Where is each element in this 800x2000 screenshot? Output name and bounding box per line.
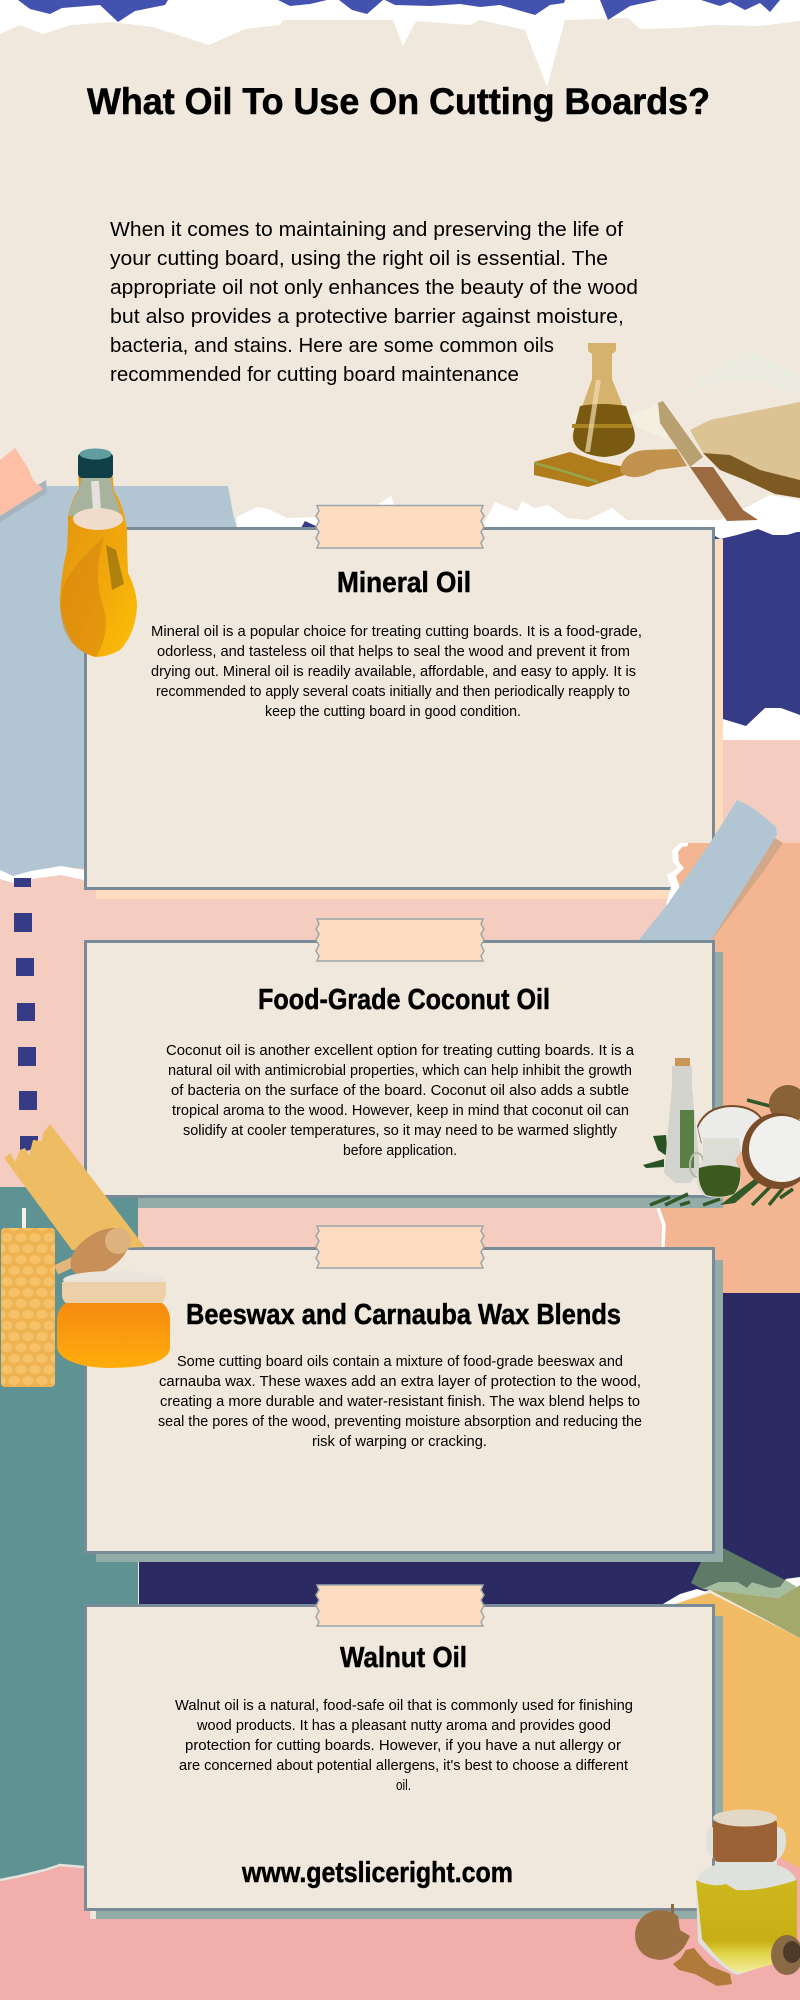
tape label [316, 1585, 484, 1626]
text block: introduction [110, 218, 638, 386]
icon: torn peach paper corner [0, 448, 47, 522]
text: walnut oil description: are concerned about potential allergens, it's best to choose a different [179, 1758, 628, 1774]
icon: navy dashed squares [14, 878, 38, 1152]
heading: mineral oil: Mineral Oil [337, 567, 471, 599]
text: mineral oil description: Mineral oil is a popular choice for treating cutting boards. It is a food-grade, [151, 624, 642, 640]
text: coconut oil description: Coconut oil is another excellent option for treating cutting boards. It is a [166, 1043, 635, 1059]
background: torn pale edge on pink paper [0, 1865, 84, 1880]
panel: walnut oil card [86, 1585, 723, 1919]
text: wax blends description: risk of warping or cracking. [312, 1434, 487, 1450]
text: wax blends description: creating a more durable and water-resistant finish. The wax blend helps to [160, 1394, 640, 1410]
text: wax blends description: seal the pores of the wood, preventing moisture absorption and reducing the [158, 1414, 642, 1430]
text: coconut oil description [166, 1043, 635, 1159]
text: wax blends description [158, 1354, 642, 1450]
background: pink bottom paper [0, 1855, 800, 2000]
heading: walnut oil: Walnut Oil [340, 1642, 467, 1674]
icon: oil flask, bread board and knife [534, 343, 800, 521]
icon: blue-grey tape upper right [637, 800, 783, 942]
text: wax blends description: Some cutting board oils contain a mixture of food-grade beeswax and [177, 1354, 623, 1370]
text: walnut oil description: oil. [396, 1778, 411, 1794]
tape label [316, 919, 484, 961]
background: dark navy block [139, 1293, 800, 1605]
title: What Oil To Use On Cutting Boards? [87, 81, 710, 122]
tape label [316, 1226, 484, 1268]
text: mineral oil description: keep the cutting board in good condition. [265, 704, 521, 720]
icon: yellow tape left [4, 1124, 145, 1250]
text: coconut oil description: of bacteria on the surface of the board. Coconut oil also adds a subtle [171, 1083, 629, 1099]
icon: mineral oil bottle [60, 448, 137, 657]
text: mineral oil description: drying out. Mineral oil is readily available, affordable, and easy to apply. It is [151, 664, 636, 680]
icon: coconut and oil bottles [643, 1058, 800, 1205]
background: cream header paper [0, 0, 800, 540]
text block: introduction: bacteria, and stains. Here are some common oils [110, 334, 554, 357]
background: torn white top edge [0, 0, 800, 87]
text: mineral oil description: odorless, and tasteless oil that helps to seal the wood and prevent it from [157, 644, 630, 660]
heading: wax blends: Beeswax and Carnauba Wax Blends [186, 1299, 621, 1331]
background: torn blue top strip [18, 0, 780, 22]
icon: walnut oil bottle and walnuts [635, 1810, 800, 1986]
tape label [316, 506, 484, 548]
panel: coconut oil card [86, 919, 723, 1208]
background: small navy scrap [301, 521, 318, 528]
icon: honey jar and dipper [56, 1218, 170, 1368]
icon: beeswax candle [1, 1208, 55, 1387]
background: navy block upper right [715, 529, 800, 726]
website url: www.getsliceright.com [241, 1857, 513, 1889]
background: white torn edge on blue-grey paper [0, 866, 84, 883]
text block: introduction: appropriate oil not only enhances the beauty of the wood [110, 276, 638, 299]
background: blue-grey paper left [0, 486, 237, 877]
text: walnut oil description: protection for cutting boards. However, if you have a nut allergy or [185, 1738, 621, 1754]
text: walnut oil description: wood products. It has a pleasant nutty aroma and provides good [196, 1718, 611, 1734]
text: coconut oil description: solidify at cooler temperatures, so it may need to be warmed slightly [183, 1123, 618, 1139]
text: coconut oil description: natural oil with antimicrobial properties, which can help inhibit the growth [168, 1063, 632, 1079]
text block: introduction: recommended for cutting board maintenance [110, 363, 519, 386]
background: green torn paper [663, 1548, 800, 1638]
text: coconut oil description: before application. [343, 1143, 457, 1159]
background: teal paper [0, 1187, 138, 1880]
text block: introduction: your cutting board, using the right oil is essential. The [110, 247, 608, 270]
panel: wax blends card [86, 1226, 723, 1562]
text: coconut oil description: tropical aroma to the wood. However, keep in mind that coconut oil can [172, 1103, 629, 1119]
text block: introduction: but also provides a protective barrier against moisture, [110, 305, 624, 328]
background: golden paper lower right [675, 1593, 800, 1925]
text: mineral oil description: recommended to apply several coats initially and then periodically reapply to [156, 684, 630, 700]
background: white tear on peach paper [658, 843, 688, 1247]
background: peach torn paper right [656, 843, 800, 1293]
text: walnut oil description [175, 1698, 633, 1794]
text block: introduction: When it comes to maintaining and preserving the life of [110, 218, 623, 241]
text: walnut oil description: Walnut oil is a natural, food-safe oil that is commonly used for finishing [175, 1698, 633, 1714]
panel: mineral oil card [86, 506, 723, 899]
heading: coconut oil: Food-Grade Coconut Oil [258, 984, 550, 1016]
text: mineral oil description [151, 624, 642, 720]
background: pink paper [0, 738, 800, 1298]
text: wax blends description: carnauba wax. These waxes add an extra layer of protection to the wood, [159, 1374, 641, 1390]
background: torn white strip above first card [237, 495, 800, 740]
